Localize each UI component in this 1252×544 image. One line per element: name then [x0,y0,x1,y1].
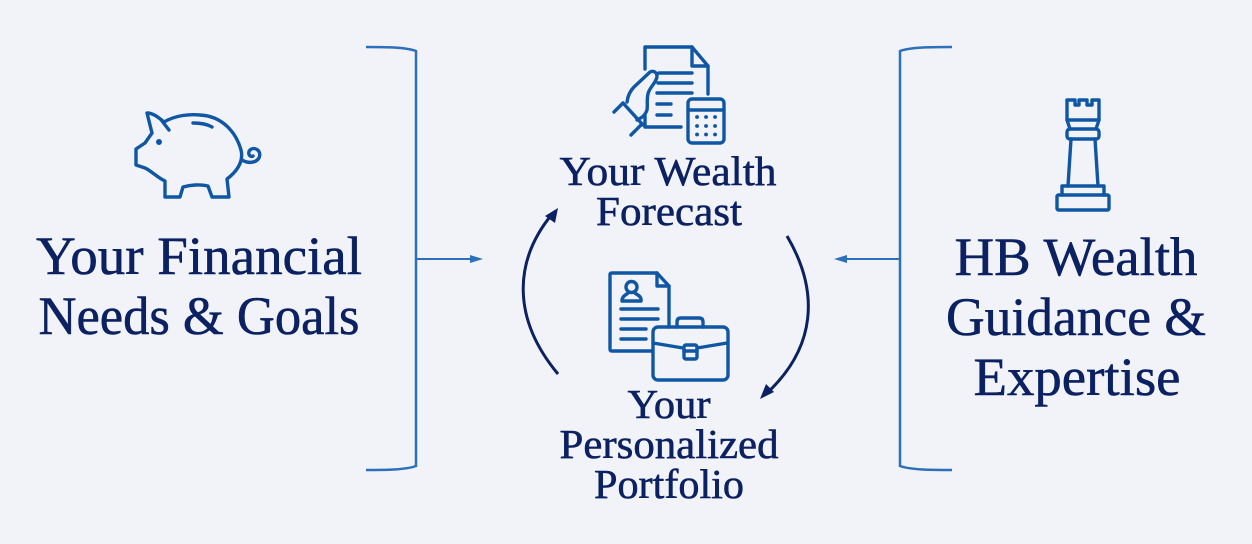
heading: your financial needs and goals: Needs & Goals [38,286,360,346]
icon: piggy bank [136,113,260,197]
heading: hb wealth guidance and expertise: Guidance & [946,287,1206,347]
heading: your personalized portfolio [560,381,778,507]
heading: your wealth forecast [560,148,776,234]
icon: forecast document with hand and calculator [614,47,724,143]
icon: chess rook [1057,100,1109,210]
arrow: right bracket to centre [834,255,899,263]
heading: your personalized portfolio: Portfolio [594,461,744,507]
heading: hb wealth guidance and expertise [946,227,1206,407]
icon: resume and briefcase [610,273,728,380]
heading: hb wealth guidance and expertise: Expertise [974,347,1180,407]
heading: your wealth forecast: Your Wealth [560,148,776,194]
right bracket [900,47,952,470]
arrow: left bracket to centre [417,255,483,263]
heading: your wealth forecast: Forecast [596,188,743,234]
arrow: cycle up to forecast [523,208,558,374]
arrow: cycle down to portfolio [760,236,808,399]
heading: your financial needs and goals [36,226,362,346]
left bracket [366,47,416,470]
heading: your financial needs and goals: Your Financial [36,226,362,286]
heading: your personalized portfolio: Your [628,381,711,427]
heading: hb wealth guidance and expertise: HB Wealth [954,227,1198,287]
heading: your personalized portfolio: Personalized [560,421,778,467]
